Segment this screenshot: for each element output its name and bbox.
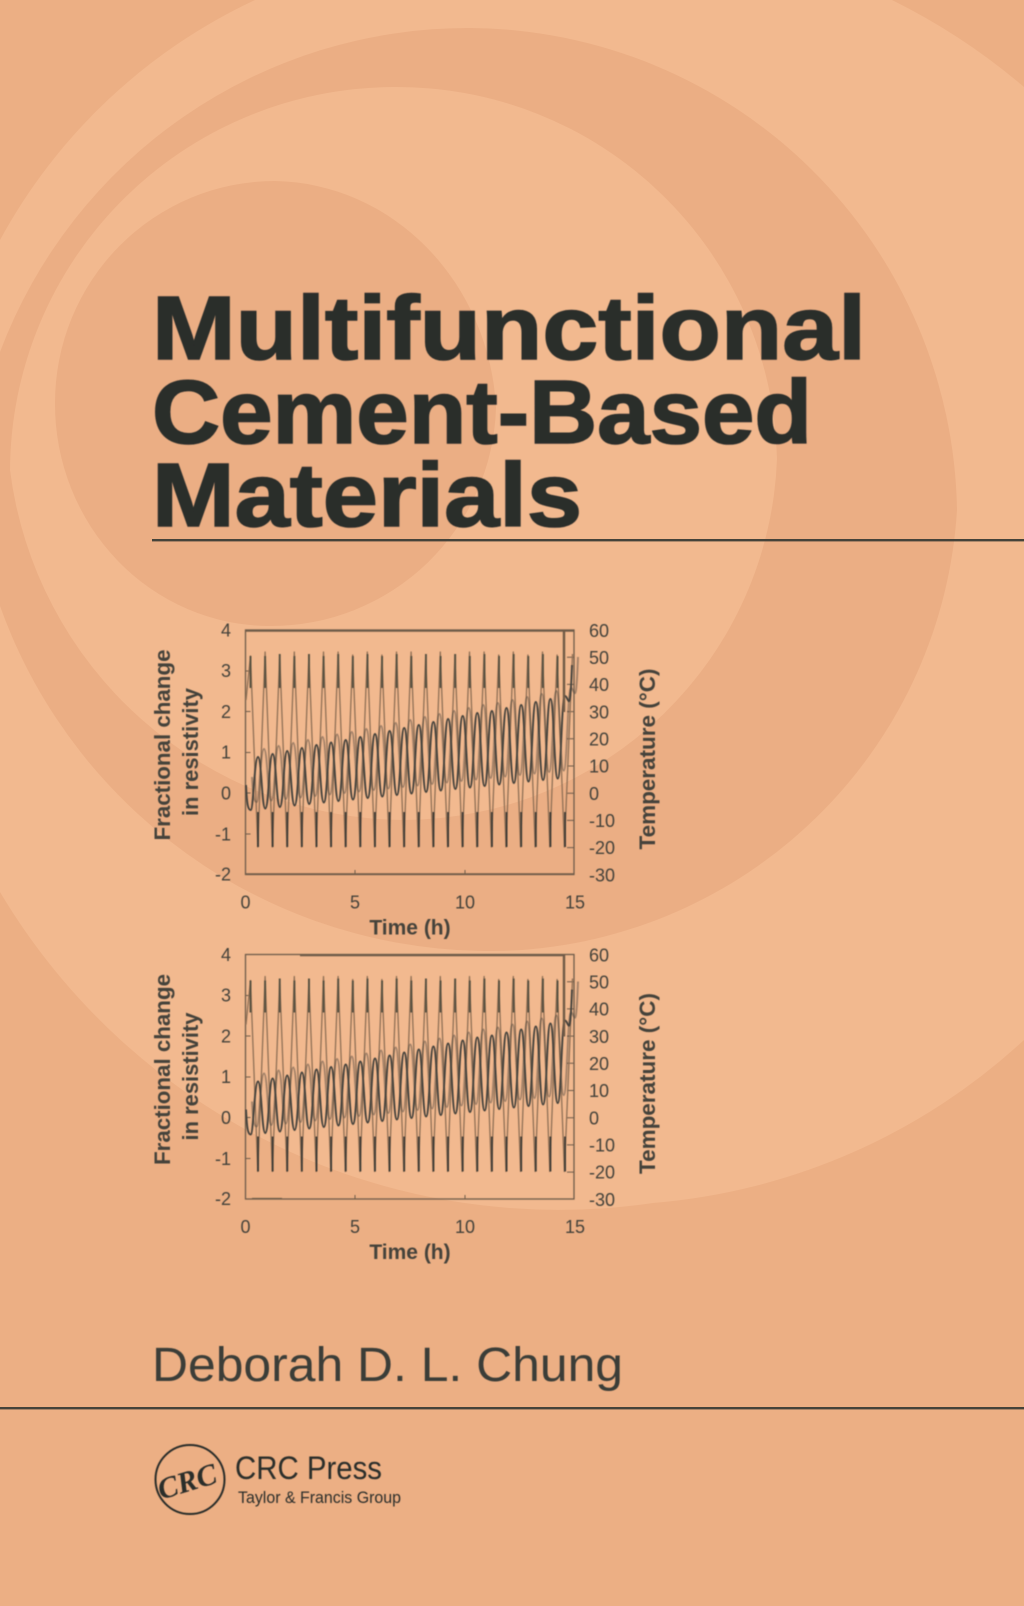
chart 2 right axis labels: 30 (589, 1027, 609, 1047)
chart 2 frame and ticks (246, 954, 574, 1199)
chart 1 x axis labels: 0 (240, 892, 251, 912)
chart 2 x axis labels (240, 1217, 585, 1237)
publisher group: Taylor & Francis Group (238, 1488, 401, 1507)
chart 2 x axis title: Time (h) (369, 1241, 451, 1264)
title: Multifunctional (152, 279, 866, 379)
chart 1 x axis labels: 15 (565, 892, 585, 912)
chart 1 left axis labels: 2 (221, 702, 231, 722)
chart 1: resistivity and temperature vs time (150, 620, 660, 940)
chart 2 right axis labels (589, 946, 615, 1210)
chart 2 left axis labels: 1 (221, 1067, 231, 1087)
chart 1 right axis labels: 50 (589, 648, 609, 668)
chart 1 left axis labels: -2 (215, 864, 231, 884)
chart 2 left axis title: in resistivity (178, 1012, 203, 1140)
chart 1 x axis labels (240, 892, 585, 912)
chart 2 right axis labels: 10 (589, 1081, 609, 1101)
chart 2 x axis labels: 10 (455, 1217, 475, 1237)
chart 1 right axis labels: 40 (589, 675, 609, 695)
chart 1 left axis labels: 3 (221, 661, 231, 681)
chart 1 left axis title: in resistivity (178, 687, 203, 816)
chart 2 left axis labels (215, 945, 231, 1209)
chart 2 right axis labels: 60 (589, 946, 609, 966)
chart 2 left axis labels: 3 (221, 986, 231, 1006)
chart 2 right axis labels: 40 (589, 1000, 609, 1020)
publisher logo (154, 1445, 401, 1514)
icon: CRC circle: CRC (154, 1457, 222, 1506)
chart 1 right axis title: Temperature (°C) (635, 668, 660, 850)
author rule (0, 1407, 1024, 1409)
author name: Deborah D. L. Chung (152, 1339, 623, 1392)
chart 1 right axis labels: 10 (589, 756, 609, 776)
chart 1 right axis labels: 0 (589, 784, 599, 804)
chart 2 right axis labels: -20 (589, 1162, 615, 1182)
chart 2 x axis labels: 15 (565, 1217, 585, 1237)
chart 2 x axis labels: 0 (240, 1217, 251, 1237)
icon: CRC circle (154, 1445, 224, 1514)
chart 1 left axis title: Fractional change (150, 650, 175, 840)
chart 2 left axis labels: 0 (221, 1108, 231, 1128)
chart 1 left axis labels: 4 (221, 620, 231, 640)
chart 1 data traces (246, 630, 578, 847)
chart 2 left axis labels: 4 (221, 945, 231, 965)
chart 1 left axis labels (215, 620, 231, 884)
chart 2 right axis labels: 50 (589, 972, 609, 992)
background: spiral rings (0, 0, 1024, 1210)
title (152, 279, 866, 546)
chart 2 left axis labels: -1 (215, 1149, 231, 1169)
chart 1 left axis labels: -1 (215, 824, 231, 844)
chart 1 right axis labels: -30 (589, 866, 615, 886)
chart 2 right axis title: Temperature (°C) (635, 993, 660, 1174)
chart 2 right axis labels: -30 (589, 1190, 615, 1210)
chart 1 x axis title: Time (h) (369, 916, 451, 940)
title: Materials (152, 446, 582, 546)
chart 1 right axis labels: 20 (589, 730, 609, 750)
chart 1 right axis labels: 60 (589, 621, 609, 641)
chart 2 left axis title: Fractional change (150, 974, 175, 1165)
chart 2 left axis title (150, 974, 203, 1165)
chart 2 data traces (246, 954, 578, 1172)
chart 2: resistivity and temperature vs time (150, 945, 660, 1264)
chart 2 x axis labels: 5 (350, 1217, 360, 1237)
chart 1 frame and ticks (246, 630, 574, 874)
chart 1 x axis labels: 5 (350, 892, 360, 912)
chart 1 right axis labels: -20 (589, 838, 615, 858)
title: Cement-Based (152, 363, 812, 463)
chart 2 left axis labels: 2 (221, 1026, 231, 1046)
chart 1 left axis labels: 1 (221, 742, 231, 762)
chart 1 x axis labels: 10 (455, 892, 475, 912)
chart 2 right axis labels: -10 (589, 1136, 615, 1156)
chart 1 right axis labels: -10 (589, 811, 615, 831)
chart 1 right axis labels: 30 (589, 702, 609, 722)
publisher name: CRC Press (235, 1450, 382, 1486)
chart 1 left axis title (150, 650, 203, 840)
title rule (152, 539, 1024, 541)
chart 2 right axis labels: 20 (589, 1054, 609, 1074)
chart 1 right axis labels (589, 621, 615, 886)
chart 1 left axis labels: 0 (221, 784, 231, 804)
chart 2 left axis labels: -2 (215, 1189, 231, 1209)
chart 2 right axis labels: 0 (589, 1108, 599, 1128)
